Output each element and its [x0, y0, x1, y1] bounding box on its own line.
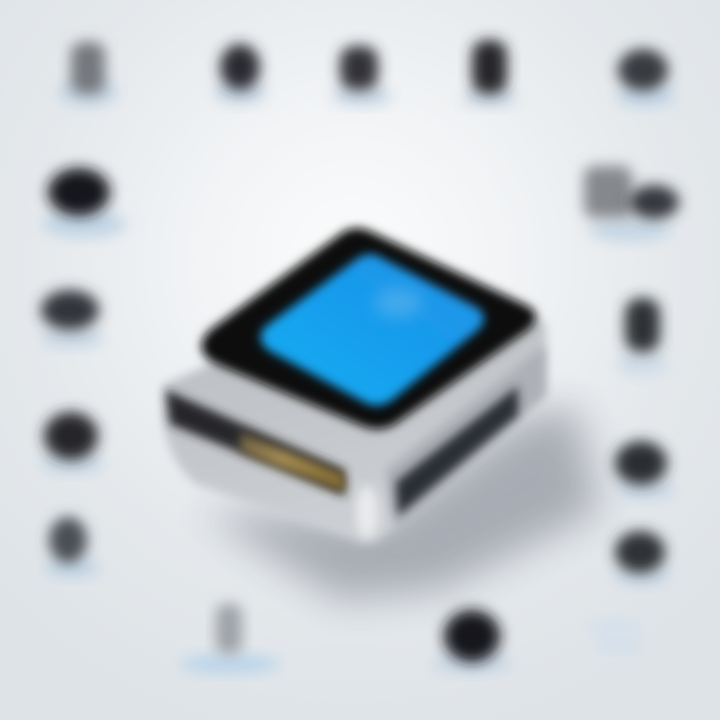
device right side	[385, 345, 545, 530]
device shadow	[200, 405, 600, 600]
front corner highlight	[356, 486, 378, 538]
icon: top row 3	[332, 46, 392, 106]
icon: top row 4	[462, 40, 518, 107]
device body	[163, 300, 546, 543]
icon: top row 5	[616, 49, 676, 107]
icon: top row 2	[214, 44, 266, 104]
icon: bottom row 1	[180, 604, 280, 674]
right side dark vent	[396, 386, 518, 516]
icon: left column 2	[40, 290, 104, 348]
icon: bottom row 3	[587, 620, 643, 652]
icon: right column 2	[616, 298, 668, 376]
icon: right column 1	[584, 166, 679, 242]
front dark slot	[166, 390, 345, 496]
icon: left column 4	[44, 517, 100, 578]
icon: bottom row 2	[432, 610, 512, 674]
blue screen	[260, 254, 484, 406]
central device	[163, 228, 546, 543]
top bezel	[201, 228, 536, 429]
icon: right column 3	[615, 441, 675, 500]
icon: right column 4	[614, 531, 670, 586]
icon: left column 1	[42, 168, 126, 238]
screen highlight	[374, 288, 422, 318]
icon: top row 1	[58, 42, 118, 106]
front gold connector	[240, 432, 344, 492]
icon: left column 3	[40, 412, 104, 474]
